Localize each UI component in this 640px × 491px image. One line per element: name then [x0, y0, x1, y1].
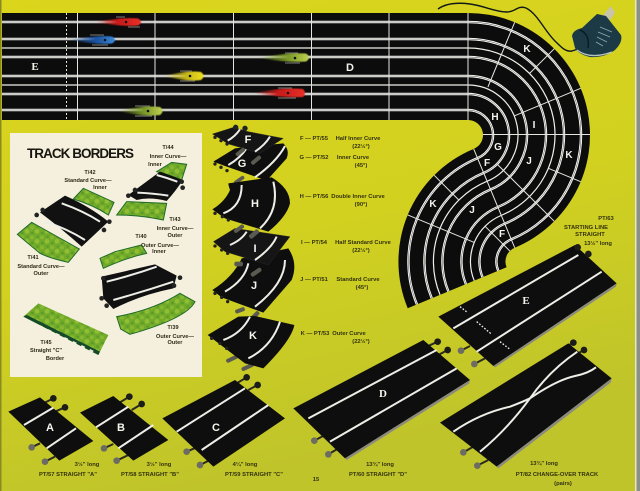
captions D E change-over [349, 216, 615, 487]
curve piece labels: (22½°) [352, 338, 370, 345]
letters A B C: C [212, 422, 220, 434]
curve piece labels: F — PT/55 [300, 136, 329, 142]
curve pieces column [208, 125, 392, 372]
border piece labels: Inner [152, 249, 167, 255]
border piece labels: Outer Curve— [156, 334, 194, 340]
curve piece labels: H — PT/56 [300, 194, 329, 200]
curve piece labels: Standard Curve [336, 277, 380, 283]
track letters on layout: K [565, 150, 573, 161]
captions A B C: 4¼" long [233, 461, 258, 468]
border piece labels: T/44 [162, 145, 174, 151]
border piece illustrations [17, 162, 195, 355]
curve piece labels: Half Standard Curve [335, 240, 392, 246]
hand controller [572, 6, 621, 57]
border piece labels: T/39 [167, 325, 179, 331]
track letters on layout: H [491, 112, 499, 123]
border piece labels: T/45 [40, 340, 52, 346]
track letters on layout: I [533, 120, 536, 131]
track letters on layout: J [469, 205, 475, 216]
page number: 15 [313, 477, 320, 483]
captions D E change-over: STRAIGHT [575, 232, 605, 238]
captions D E change-over: PT/63 [598, 216, 615, 222]
racing cars [68, 17, 309, 116]
curve piece labels: K — PT/53 [301, 331, 330, 337]
curve piece letters: I [253, 243, 257, 255]
curve piece labels [300, 136, 392, 345]
captions D E change-over: PT/82 CHANGE-OVER TRACK [516, 472, 599, 478]
panel: track borders [10, 133, 202, 377]
track letters on layout: F [499, 229, 505, 240]
curve piece labels: (22½°) [352, 143, 370, 150]
layout track: straights and S-curve [2, 13, 590, 308]
straight pieces D E and change-over track [293, 216, 617, 487]
track letters on layout: D [346, 62, 354, 74]
letters D E [379, 295, 530, 400]
border piece labels: T/42 [84, 170, 96, 176]
border piece labels: Inner [148, 162, 163, 168]
captions A B C [39, 461, 283, 478]
border piece labels: Inner Curve— [157, 226, 194, 232]
curve piece labels: Half Inner Curve [336, 136, 381, 142]
captions D E change-over: 13½" long [584, 240, 612, 247]
curve piece letters: J [251, 280, 257, 292]
letters A B C [46, 422, 220, 434]
border piece labels [17, 145, 194, 362]
controller cable [438, 3, 578, 51]
border piece labels: Inner [93, 185, 108, 191]
curve piece labels: (45°) [355, 163, 367, 169]
captions A B C: PT/57 STRAIGHT "A" [39, 472, 97, 478]
heading: track borders: TRACK BORDERS [27, 146, 134, 161]
curve piece letters: G [238, 158, 246, 170]
letters D E: E [522, 295, 530, 307]
border piece labels: Outer [34, 271, 49, 277]
track letters on layout: K [523, 44, 531, 55]
border piece labels: Standard Curve— [17, 264, 65, 270]
curve piece labels: Inner Curve [337, 155, 370, 161]
border piece labels: Inner Curve— [150, 154, 187, 160]
border piece labels: Outer [168, 340, 183, 346]
captions A B C: PT/58 STRAIGHT "B" [121, 472, 179, 478]
curve piece letters: K [249, 330, 257, 342]
curve piece labels: Outer Curve [332, 331, 367, 337]
curve piece labels: I — PT/54 [301, 240, 328, 246]
curve piece labels: J — PT/51 [300, 277, 329, 283]
curve piece labels: (22½°) [352, 247, 370, 254]
captions D E change-over: STARTING LINE [564, 225, 608, 231]
curve piece labels: (45°) [356, 285, 368, 291]
captions A B C: PT/59 STRAIGHT "C" [225, 472, 283, 478]
track letters on layout: E [31, 61, 39, 73]
straight pieces A B C [8, 374, 285, 478]
curve piece letters: F [245, 134, 252, 146]
captions D E change-over: (pairs) [554, 481, 572, 487]
border piece labels: Outer [168, 233, 183, 239]
curve piece labels: G — PT/52 [300, 155, 328, 161]
captions A B C: 3½" long [75, 461, 100, 468]
captions A B C: 3½" long [147, 461, 172, 468]
border piece labels: Standard Curve— [64, 178, 112, 184]
curve piece labels: Double Inner Curve [331, 194, 386, 200]
border piece labels: T/40 [135, 234, 147, 240]
track letters on layout: J [526, 156, 532, 167]
captions D E change-over: 13¾" long [530, 460, 558, 467]
letters A B C: B [117, 422, 125, 434]
border piece labels: Outer Curve— [141, 243, 179, 249]
border piece labels: T/43 [169, 217, 181, 223]
track letters on layout: K [429, 199, 437, 210]
captions D E change-over: PT/60 STRAIGHT "D" [349, 472, 407, 478]
border piece labels: Straight "C" [30, 348, 62, 354]
track letters on layout [31, 44, 573, 240]
border piece labels: T/41 [27, 255, 39, 261]
letters A B C: A [46, 422, 54, 434]
curve piece letters: H [251, 198, 259, 210]
letters D E: D [379, 388, 387, 400]
curve piece labels: (90°) [355, 202, 367, 208]
track letters on layout: G [494, 142, 502, 153]
captions D E change-over: 13¾" long [366, 461, 394, 468]
track letters on layout: F [484, 158, 490, 169]
border piece labels: Border [46, 356, 65, 362]
curve piece letters [238, 134, 259, 342]
